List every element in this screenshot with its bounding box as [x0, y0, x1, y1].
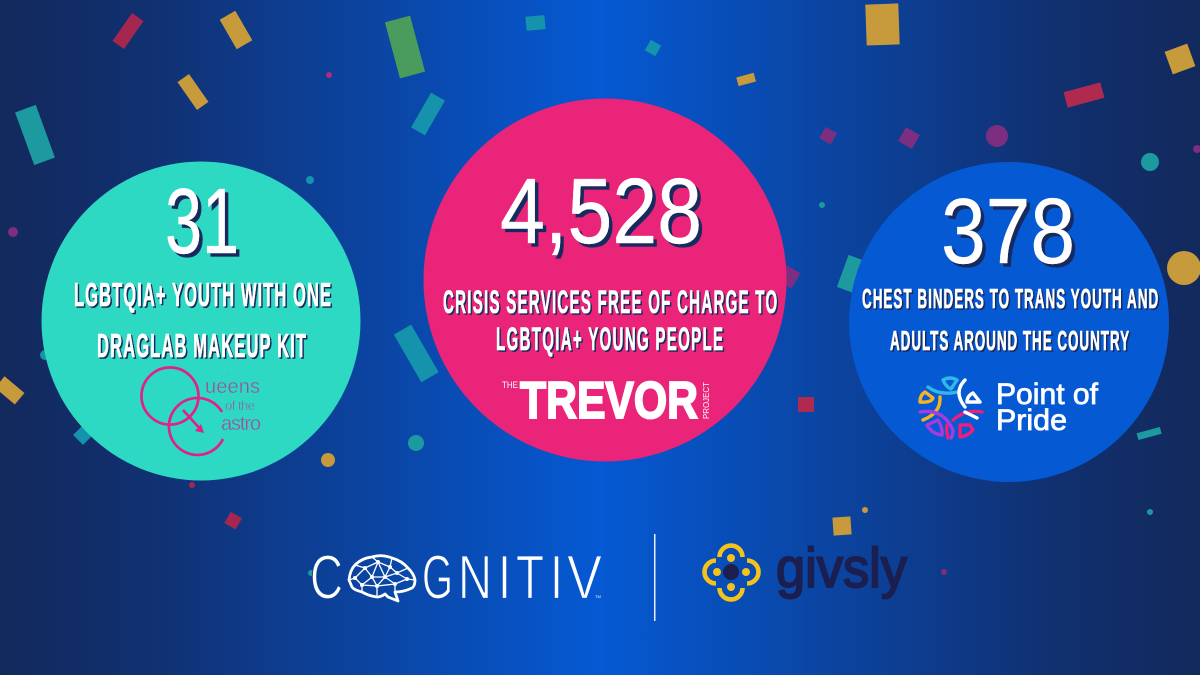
stat description: makeup kits: LGBTQIA+ YOUTH WITH ONE — [74, 276, 331, 314]
logo: Queens of the Castro: ueens — [205, 376, 260, 398]
stat description: makeup kits — [74, 276, 331, 365]
panel: blue stat circle — [849, 162, 1169, 482]
logo: Cognitiv: I — [550, 544, 563, 612]
icon: Givsly flower — [704, 546, 758, 599]
logo: Point of Pride — [920, 378, 1099, 438]
logo: Cognitiv: N — [458, 544, 492, 612]
panel: pink stat circle — [424, 98, 786, 462]
logo: Givsly — [704, 536, 907, 599]
stat description: chest binders: ADULTS AROUND THE COUNTRY — [890, 325, 1129, 356]
logo: Cognitiv: TM — [595, 594, 601, 599]
logo: Point of Pride: Point of — [996, 378, 1099, 411]
logo: Point of Pride: Pride — [996, 404, 1067, 437]
icon: brain network — [349, 556, 415, 601]
logo: Cognitiv: C — [310, 544, 343, 612]
divider between logos — [654, 534, 656, 621]
stat number: 31: 31 — [165, 169, 239, 273]
stat description: crisis services: LGBTQIA+ YOUNG PEOPLE — [496, 322, 723, 358]
stat number: 378: 378 — [941, 179, 1075, 283]
logo: Cognitiv: T — [516, 544, 544, 612]
logo: Givsly: givsly — [776, 536, 907, 599]
stat description: makeup kits: DRAGLAB MAKEUP KIT — [97, 327, 306, 365]
stat description: chest binders — [862, 283, 1158, 356]
logo: Cognitiv: I — [498, 544, 511, 612]
logo: Cognitiv: V — [567, 544, 603, 612]
logo: The Trevor Project: TREVOR — [520, 372, 698, 430]
logo: The Trevor Project: THE — [502, 380, 518, 390]
stat description: chest binders: CHEST BINDERS TO TRANS YOUTH AND — [862, 283, 1158, 314]
logo: Queens of the Castro: astro — [221, 413, 261, 435]
panel: teal stat circle — [42, 162, 360, 480]
logo: Cognitiv: G — [422, 544, 453, 612]
logo: Queens of the Castro: THE — [220, 372, 239, 378]
stat description: crisis services — [443, 285, 777, 358]
logo: Queens of the Castro — [142, 368, 261, 455]
logo: The Trevor Project: PROJECT — [702, 382, 711, 419]
stat description: crisis services: CRISIS SERVICES FREE OF CHARGE TO — [443, 285, 777, 321]
stat number: 4,528: 4,528 — [500, 159, 702, 263]
logo: Cognitiv — [310, 544, 603, 612]
logo: Queens of the Castro: of the — [225, 398, 255, 413]
